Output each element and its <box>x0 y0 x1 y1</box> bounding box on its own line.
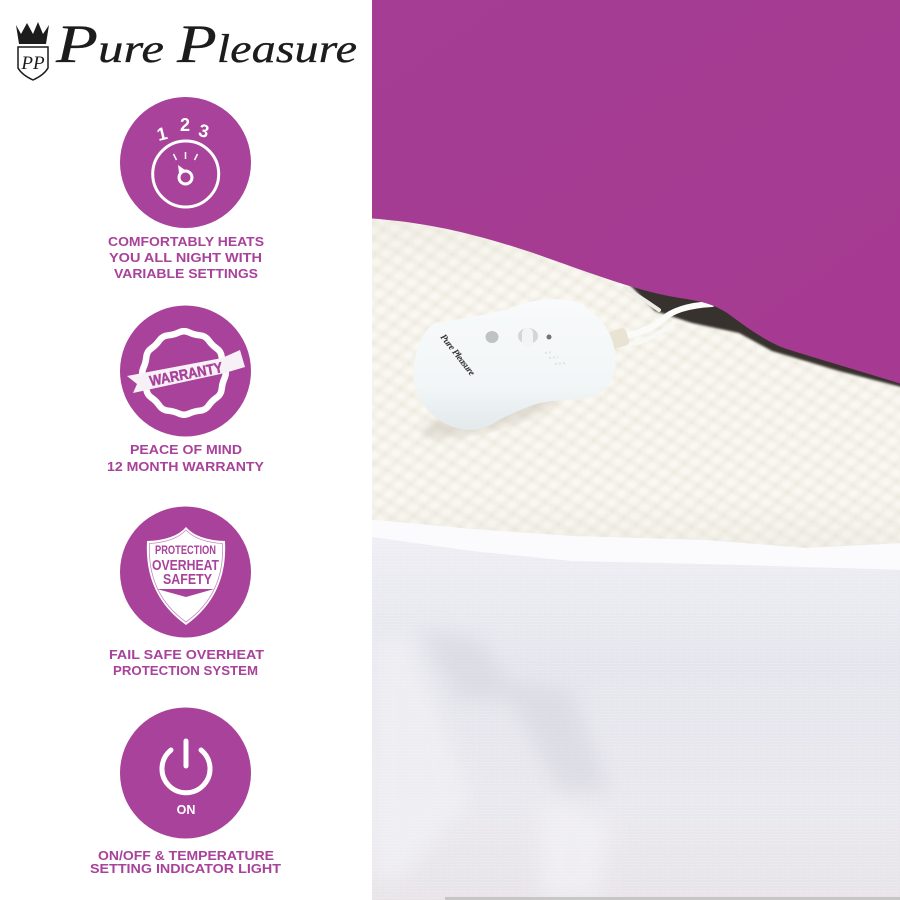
caption: PROTECTION SYSTEM <box>113 664 258 678</box>
shadow gap under sheet <box>625 280 900 388</box>
icon circle: dial: 3 <box>196 120 211 142</box>
icon circle: power: ON <box>177 803 195 817</box>
caption: YOU ALL NIGHT WITH <box>109 251 262 265</box>
caption: SETTING INDICATOR LIGHT <box>90 862 281 876</box>
icon circle: warranty badge: WARRANTY <box>148 360 224 390</box>
icon circle: shield: OVERHEAT <box>152 558 219 574</box>
icon circle: shield <box>120 506 251 638</box>
fleece surface <box>365 210 900 570</box>
feature: variable heat settings <box>108 97 264 281</box>
icon circle: warranty badge <box>120 306 251 436</box>
icon circle: power <box>120 708 251 838</box>
fabric folds <box>388 639 599 888</box>
controller: Pure Pleasure <box>438 333 477 379</box>
caption <box>107 443 265 474</box>
white elastic hem <box>365 519 900 570</box>
feature: warranty <box>107 306 265 474</box>
photo: mattress pad with controller <box>365 0 900 900</box>
brand name: Pleasure <box>176 14 357 74</box>
purple sheet <box>365 0 900 385</box>
bottom shadow <box>445 897 900 900</box>
caption <box>109 648 264 678</box>
icon: crest shield <box>18 47 48 80</box>
caption: PEACE OF MIND <box>130 443 242 457</box>
brand name <box>55 14 357 74</box>
feature: on/off indicator <box>90 708 281 876</box>
caption: COMFORTABLY HEATS <box>108 235 264 249</box>
icon circle: shield: SAFETY <box>163 572 212 588</box>
brand name: Pure <box>55 14 164 74</box>
icon: crest shield: PP <box>20 53 45 74</box>
power cords <box>604 288 712 351</box>
controller <box>414 299 616 430</box>
icon circle: dial: 1 <box>155 123 169 145</box>
caption: ON/OFF & TEMPERATURE <box>98 849 274 863</box>
icon: crown <box>16 22 49 44</box>
caption: VARIABLE SETTINGS <box>114 267 258 281</box>
controller shadow <box>422 401 557 439</box>
logo: Pure Pleasure <box>16 14 357 80</box>
icon circle: shield: PROTECTION <box>155 545 216 557</box>
caption <box>90 849 281 876</box>
feature: overheat protection <box>109 506 264 678</box>
caption: FAIL SAFE OVERHEAT <box>109 648 264 662</box>
fitted skirt <box>365 535 900 900</box>
caption <box>108 235 264 281</box>
icon circle: dial: 2 <box>180 115 190 135</box>
caption: 12 MONTH WARRANTY <box>107 460 265 474</box>
icon circle: dial <box>120 97 251 228</box>
left white panel <box>0 0 372 900</box>
